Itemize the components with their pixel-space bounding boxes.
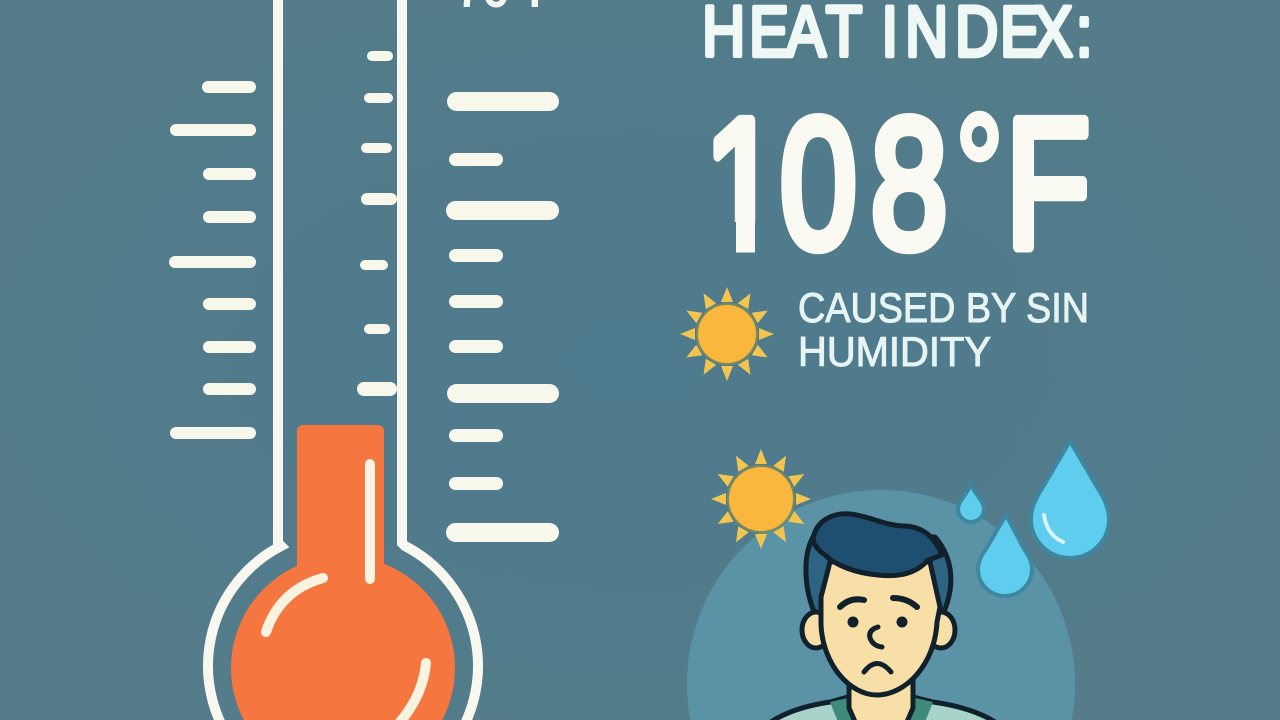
icon: large water drop — [1031, 441, 1109, 558]
big temperature value: 8 — [871, 82, 948, 287]
caption: caused by sin humidity — [798, 284, 1089, 375]
face — [821, 562, 940, 695]
left scale ticks — [169, 81, 256, 439]
icon: sun above person — [711, 449, 811, 549]
shirt — [768, 697, 998, 720]
eyes — [848, 616, 908, 628]
big temperature value: F — [1006, 82, 1090, 287]
neck — [849, 680, 913, 720]
eyebrows — [840, 598, 917, 607]
frowning mouth — [864, 664, 891, 672]
big temperature value: ° — [956, 81, 1003, 260]
backdrop circle — [687, 490, 1075, 720]
caption: caused by sin humidity: CAUSED BY SIN — [798, 284, 1089, 331]
thermometer glass outline — [208, 0, 478, 720]
big temperature value — [713, 110, 1089, 254]
illustration: person in heat — [687, 441, 1109, 720]
drop highlight — [1044, 515, 1063, 542]
big temperature value: 1 — [704, 82, 781, 287]
thermometer highlights — [266, 464, 426, 720]
nose — [870, 627, 882, 647]
shirt collar — [830, 698, 933, 720]
icon: medium water drop — [978, 515, 1032, 596]
caption: caused by sin humidity: HUMIDITY — [798, 328, 991, 375]
inner scale ticks — [357, 51, 397, 396]
left ear — [802, 612, 830, 648]
right ear — [927, 612, 955, 648]
icon: small water drop — [958, 484, 984, 522]
big temperature value: 0 — [780, 82, 857, 287]
thermometer — [169, 0, 559, 720]
side hair — [806, 537, 951, 618]
thermometer mercury — [231, 425, 455, 720]
icon: small sun — [680, 287, 774, 381]
right scale ticks — [446, 92, 559, 542]
front hair — [813, 514, 942, 576]
